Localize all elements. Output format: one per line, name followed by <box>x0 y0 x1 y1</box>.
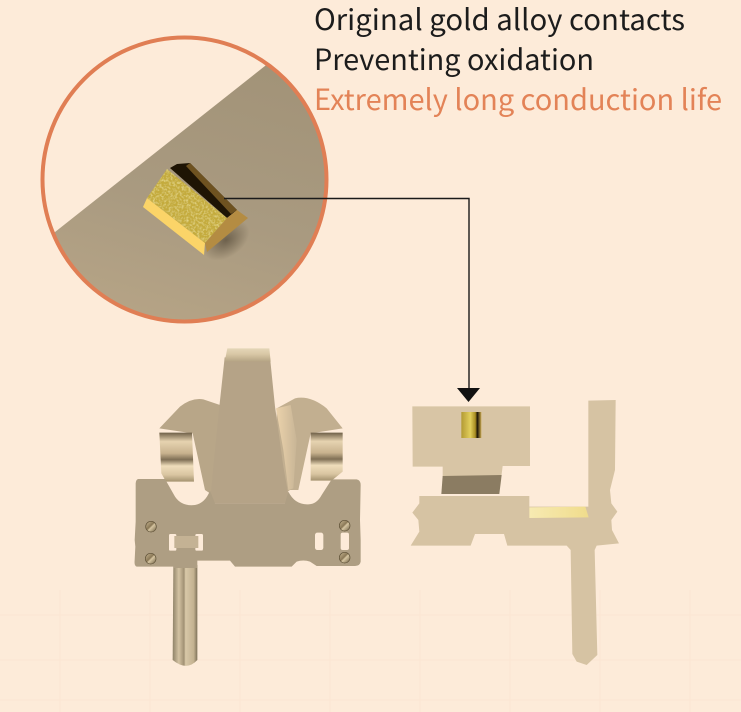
magnified gold contact circle <box>42 38 330 330</box>
base plate <box>135 479 361 568</box>
icon: gold contact block <box>143 163 248 255</box>
leader line with arrow <box>224 198 480 402</box>
rivets <box>145 520 350 564</box>
heading text block: Extremely long conduction life <box>314 77 722 119</box>
side wing springs <box>159 398 343 500</box>
left terminal part <box>135 348 361 666</box>
pin <box>173 565 197 666</box>
right terminal part <box>411 400 619 665</box>
lower bar and pin <box>411 400 619 665</box>
icon: gold contact side view <box>461 412 481 438</box>
slots <box>169 534 176 551</box>
heading text block <box>314 0 722 119</box>
top spring tongue <box>210 348 290 503</box>
upper contact plate <box>412 406 530 494</box>
heading text block: Preventing oxidation <box>314 37 594 79</box>
